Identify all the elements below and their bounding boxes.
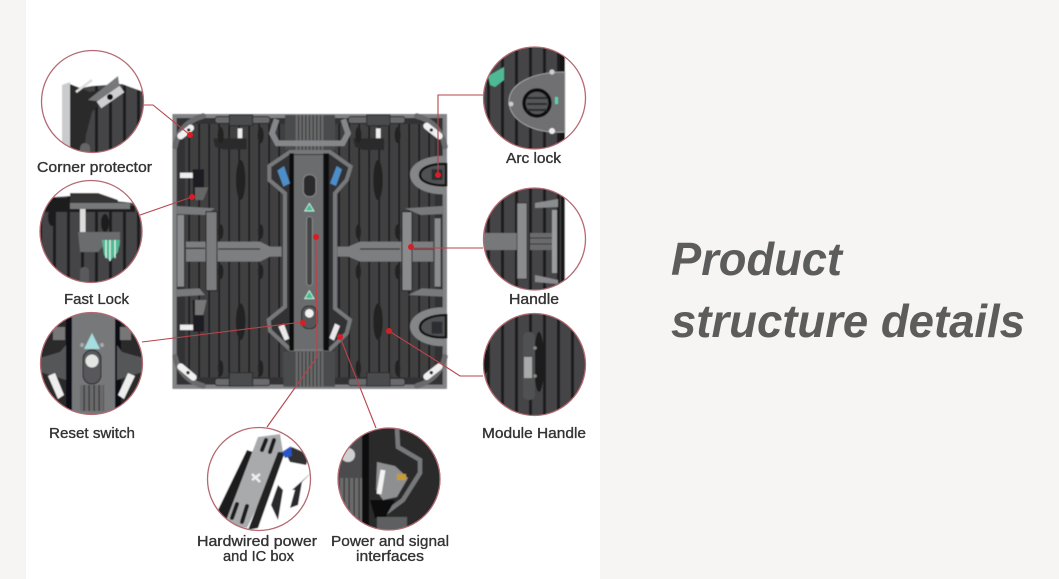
- spine inner plate: [294, 155, 323, 349]
- top and bottom rails: [215, 115, 405, 386]
- green warning triangles: [305, 203, 314, 299]
- fast locks: [180, 128, 384, 332]
- label: module handle: Module Handle: [482, 425, 586, 442]
- detail: handle: [483, 188, 586, 290]
- upper spine oval: [303, 175, 316, 197]
- label: reset switch: Reset switch: [49, 425, 135, 442]
- label: hardwired power and IC box: Hardwired power: [197, 533, 317, 550]
- label: power and signal interfaces: interfaces: [356, 548, 424, 565]
- left handle: [177, 206, 282, 297]
- label: arc lock: Arc lock: [506, 150, 562, 167]
- cabinet frame: [173, 114, 447, 389]
- white content panel: [26, 0, 600, 579]
- title: [671, 233, 1025, 347]
- LED cabinet rear view: [173, 114, 447, 389]
- reset switch: [302, 306, 317, 329]
- right handle: [337, 206, 443, 297]
- central spine: [269, 152, 351, 349]
- detail: corner protector: [41, 50, 144, 157]
- spine slot: [307, 217, 312, 286]
- callout anchor dots: [187, 132, 441, 340]
- spine rails: [289, 153, 329, 351]
- blue connectors: [277, 166, 342, 187]
- cabinet perimeter: [173, 114, 447, 389]
- corner protectors: [175, 116, 445, 386]
- white connectors: [278, 323, 340, 341]
- rib latch shapes: [218, 127, 401, 376]
- detail: fast lock: [40, 180, 143, 285]
- callout leader lines: [140, 95, 483, 428]
- detail: module handle: [479, 313, 586, 416]
- central top and bottom blocks: [283, 115, 335, 387]
- detail: reset switch: [40, 312, 143, 415]
- arc locks: [410, 156, 446, 346]
- detail: power and signal interfaces: [337, 428, 441, 532]
- title: structure details: [671, 295, 1025, 347]
- detail: arc lock: [483, 47, 586, 149]
- label: power and signal interfaces: Power and signal: [331, 533, 449, 550]
- label: power and signal interfaces: [331, 533, 449, 565]
- label: fast lock: Fast Lock: [64, 291, 129, 308]
- label: corner protector: Corner protector: [37, 159, 152, 176]
- top carry handle: [272, 119, 348, 143]
- label: hardwired power and IC box: and IC box: [223, 548, 294, 565]
- detail: hardwired power and IC box: [207, 427, 312, 531]
- title: Product: [671, 233, 844, 285]
- label: handle: Handle: [509, 291, 559, 308]
- cabinet body: [173, 114, 447, 389]
- label: hardwired power and IC box: [197, 533, 317, 565]
